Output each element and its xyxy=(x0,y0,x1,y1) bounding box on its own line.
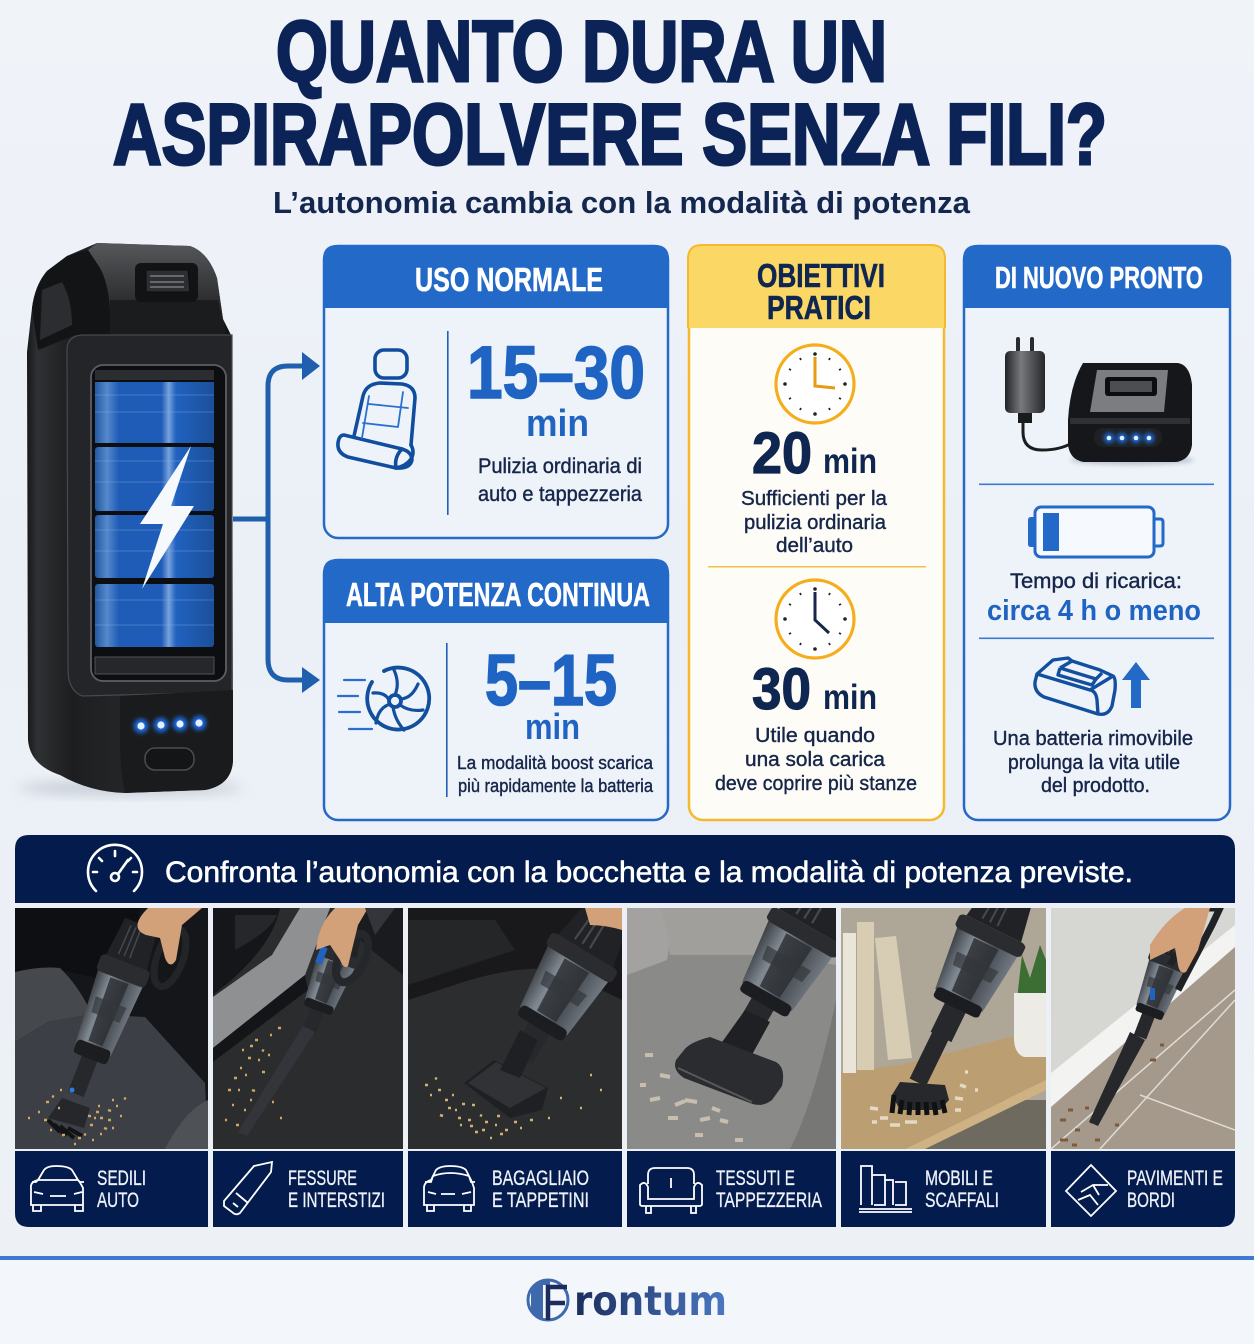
text: 20 min description: pulizia ordinaria xyxy=(744,511,887,534)
logo: frontum: rontum xyxy=(574,1277,727,1325)
icon: car rear xyxy=(424,1166,475,1211)
photo: crevice nozzle in car xyxy=(213,908,403,1149)
number: 20 min: min xyxy=(823,442,877,481)
text: pavimenti: PAVIMENTI E xyxy=(1127,1167,1223,1190)
heading: obiettivi pratici xyxy=(757,257,885,326)
number: 5-15 min: min xyxy=(525,706,580,747)
number: 30 min xyxy=(752,657,877,722)
text: circa 4 h o meno: circa 4 h o meno xyxy=(987,595,1201,627)
text: fessure: FESSURE xyxy=(288,1167,357,1190)
subtitle: L’autonomia cambia con la modalità di potenza xyxy=(273,185,971,220)
text: fessure: E INTERSTIZI xyxy=(288,1189,385,1212)
sub: handle and hand xyxy=(137,908,202,991)
icon: removable battery with arrow xyxy=(1035,658,1150,714)
text: 30 min description xyxy=(715,724,917,795)
photo: car seat vacuuming xyxy=(15,908,208,1149)
text: bagagliaio: BAGAGLIAIO xyxy=(492,1167,589,1190)
caption: fessure xyxy=(213,1151,403,1227)
footer xyxy=(0,1256,1254,1344)
text: tessuti xyxy=(716,1167,822,1212)
text: tessuti: TESSUTI E xyxy=(716,1167,795,1190)
text: batteria rimovibile xyxy=(993,727,1193,797)
text: batteria rimovibile: Una batteria rimovibile xyxy=(993,727,1193,750)
icon: floor tile xyxy=(1066,1165,1116,1216)
panel: uso normale xyxy=(323,245,669,538)
photo: car trunk carpet xyxy=(408,900,637,1149)
text: tessuti: TAPPEZZERIA xyxy=(716,1189,822,1212)
caption: tessuti xyxy=(627,1151,836,1227)
text: mobili xyxy=(925,1167,999,1212)
sub: handle and hand xyxy=(316,908,395,987)
caption: pavimenti xyxy=(1051,1151,1235,1227)
icon: low battery xyxy=(1028,507,1163,557)
heading: uso normale: USO NORMALE xyxy=(415,261,603,298)
icon: clock 20 min xyxy=(776,345,854,423)
caption: sedili auto xyxy=(15,1151,208,1227)
heading: alta potenza continua: ALTA POTENZA CONTINUA xyxy=(346,576,650,613)
text: uso normale description xyxy=(478,455,642,506)
heading: obiettivi pratici: OBIETTIVI xyxy=(757,257,885,294)
panel: di nuovo pronto xyxy=(963,245,1231,820)
arrows: branching connector xyxy=(233,352,320,693)
icon: clock 30 min xyxy=(776,580,854,658)
number: 20 min xyxy=(752,421,877,486)
text: pavimenti: BORDI xyxy=(1127,1189,1175,1212)
text: sedili auto: SEDILI xyxy=(97,1167,146,1190)
icon: car seat xyxy=(338,350,415,468)
text: alta potenza description: più rapidamente la batteria xyxy=(458,775,654,796)
text: 30 min description: una sola carica xyxy=(745,748,886,771)
number: 30 min: 30 xyxy=(752,657,811,722)
text: bagagliaio xyxy=(492,1167,589,1212)
text: 20 min description: dell’auto xyxy=(776,534,853,557)
number: 15-30 min: min xyxy=(526,403,589,445)
illustration: charger and dock xyxy=(1005,337,1194,465)
text: 20 min description: Sufficienti per la xyxy=(741,487,888,510)
text: batteria rimovibile: prolunga la vita utile xyxy=(1008,751,1180,774)
text: uso normale description: Pulizia ordinaria di xyxy=(478,455,642,478)
photo: floor edge xyxy=(1051,908,1235,1149)
text: tempo di ricarica: Tempo di ricarica: xyxy=(1010,570,1182,593)
sub: handle and hand xyxy=(1150,908,1220,990)
text: sedili auto: AUTO xyxy=(97,1189,139,1212)
panel: alta potenza continua xyxy=(323,559,669,820)
text: sedili auto xyxy=(97,1167,146,1212)
caption: mobili xyxy=(841,1151,1046,1227)
title xyxy=(113,4,1107,183)
text: mobili: MOBILI E xyxy=(925,1167,993,1190)
icon: books xyxy=(859,1166,912,1212)
heading: obiettivi pratici: PRATICI xyxy=(767,289,871,326)
text: banner: Confronta l’autonomia con la bocchetta e la modalità di potenza previste. xyxy=(165,856,1133,889)
text: mobili: SCAFFALI xyxy=(925,1189,999,1212)
text: alta potenza description xyxy=(457,752,654,796)
text: fessure xyxy=(288,1167,385,1212)
text: bagagliaio: E TAPPETINI xyxy=(492,1189,589,1212)
icon: sofa xyxy=(640,1168,702,1213)
number: 5-15 min xyxy=(485,641,617,747)
icon: lightning bolt xyxy=(140,446,194,589)
banner: confronta autonomia xyxy=(15,835,1235,903)
text: uso normale description: auto e tappezzeria xyxy=(478,483,642,506)
icon: speed gauge xyxy=(88,845,142,891)
text: 30 min description: deve coprire più stanze xyxy=(715,772,917,795)
panel: obiettivi pratici xyxy=(688,245,945,820)
number: 15-30 min xyxy=(467,331,645,445)
icon: fan with speed lines xyxy=(338,668,429,730)
number: 15-30 min: 15–30 xyxy=(467,331,645,414)
illustration: battery pack xyxy=(18,243,242,795)
number: 5-15 min: 5–15 xyxy=(485,641,617,721)
text: 20 min description xyxy=(741,487,888,557)
text: 30 min description: Utile quando xyxy=(755,724,875,747)
caption: bagagliaio xyxy=(408,1151,622,1227)
photo: sofa fabric xyxy=(627,908,836,1149)
photo: wooden shelf xyxy=(841,908,1046,1149)
icon: crevice tool xyxy=(224,1162,272,1214)
icon: car xyxy=(31,1166,84,1211)
text: pavimenti xyxy=(1127,1167,1223,1212)
number: 20 min: 20 xyxy=(752,421,812,486)
text: batteria rimovibile: del prodotto. xyxy=(1041,774,1150,797)
text: alta potenza description: La modalità boost scarica xyxy=(457,752,654,773)
number: 30 min: min xyxy=(823,678,877,717)
title: QUANTO DURA UN xyxy=(276,4,887,100)
